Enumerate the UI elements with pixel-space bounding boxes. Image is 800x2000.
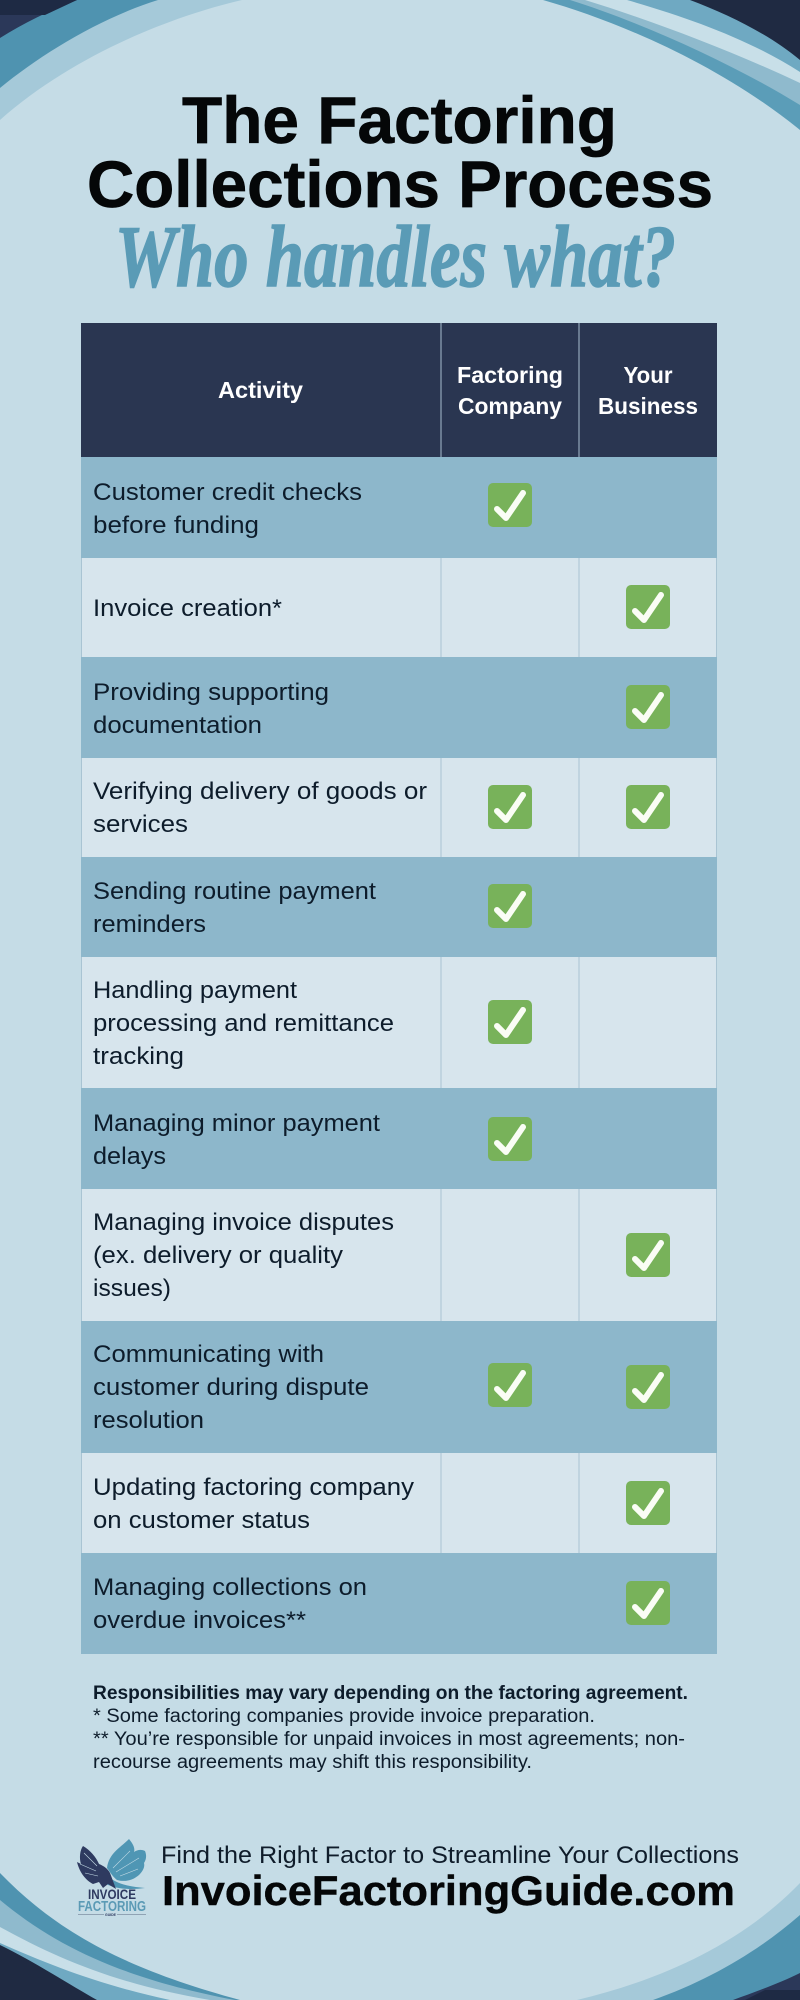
icon: check factoring company bbox=[488, 483, 532, 527]
icon: check factoring company bbox=[488, 785, 532, 829]
row: supporting documentation: Providing supporting bbox=[93, 679, 329, 706]
row: invoice disputes bbox=[81, 1189, 717, 1321]
row: dispute communication: resolution bbox=[93, 1407, 204, 1434]
row: overdue collections: overdue invoices** bbox=[93, 1607, 306, 1634]
footnotes: ** You’re responsible for unpaid invoices in most agreements; non- bbox=[93, 1729, 685, 1750]
row: updating factoring company: Updating factoring company bbox=[93, 1474, 414, 1501]
icon: check your business bbox=[626, 1233, 670, 1277]
icon: check factoring company bbox=[488, 1363, 532, 1407]
row: payment processing: Handling payment bbox=[93, 977, 297, 1004]
row: updating factoring company bbox=[81, 1453, 717, 1553]
row: updating factoring company: on customer status bbox=[93, 1507, 310, 1534]
icon: bird left wing bbox=[77, 1846, 116, 1889]
logo: Invoice Factoring Guide bbox=[77, 1839, 146, 1917]
row: supporting documentation bbox=[81, 657, 717, 758]
row: dispute communication: Communicating with bbox=[93, 1341, 324, 1368]
footnotes: * Some factoring companies provide invoice preparation. bbox=[93, 1706, 595, 1727]
row: invoice disputes: issues) bbox=[93, 1275, 171, 1302]
footnotes: recourse agreements may shift this responsibility. bbox=[93, 1752, 532, 1773]
swoosh: top right corner bbox=[543, 0, 800, 130]
icon: check factoring company bbox=[488, 884, 532, 928]
icon: check your business bbox=[626, 585, 670, 629]
row: dispute communication bbox=[81, 1321, 717, 1453]
table header: Factoring bbox=[457, 362, 563, 388]
footer website: InvoiceFactoringGuide.com bbox=[162, 1867, 735, 1914]
icon: check your business bbox=[626, 785, 670, 829]
logo: Invoice Factoring Guide: INVOICE bbox=[88, 1886, 136, 1902]
row: minor payment delays: Managing minor payment bbox=[93, 1110, 380, 1137]
swoosh: bottom left corner bbox=[0, 1873, 240, 2000]
footnotes: Responsibilities may vary depending on the factoring agreement. bbox=[93, 1683, 688, 1704]
row: supporting documentation: documentation bbox=[93, 712, 262, 739]
row: customer credit checks: Customer credit checks bbox=[93, 479, 362, 506]
row: verifying delivery bbox=[81, 758, 717, 857]
row: payment processing: processing and remittance bbox=[93, 1010, 394, 1037]
title: Collections Process bbox=[87, 147, 713, 221]
row: payment processing: tracking bbox=[93, 1043, 184, 1070]
title: The Factoring bbox=[182, 83, 617, 157]
logo: Invoice Factoring Guide: GUIDE bbox=[105, 1912, 116, 1917]
row: verifying delivery: Verifying delivery of goods or bbox=[93, 778, 427, 805]
footer tagline: Find the Right Factor to Streamline Your Collections bbox=[161, 1842, 739, 1869]
row: payment reminders: Sending routine payment bbox=[93, 878, 376, 905]
row: invoice disputes: (ex. delivery or quality bbox=[93, 1242, 343, 1269]
icon: check factoring company bbox=[488, 1117, 532, 1161]
row: customer credit checks bbox=[81, 457, 717, 558]
icon: check your business bbox=[626, 1481, 670, 1525]
logo: Invoice Factoring Guide: FACTORING bbox=[78, 1899, 146, 1915]
row: payment processing bbox=[81, 957, 717, 1088]
row: invoice creation bbox=[81, 558, 717, 657]
table header: Your bbox=[624, 362, 673, 388]
icon: check your business bbox=[626, 1581, 670, 1625]
row: payment reminders: reminders bbox=[93, 911, 206, 938]
row: payment reminders bbox=[81, 857, 717, 957]
swoosh: bottom right corner bbox=[577, 1883, 800, 2000]
row: overdue collections: Managing collections on bbox=[93, 1574, 367, 1601]
row: verifying delivery: services bbox=[93, 811, 188, 838]
swoosh: top left corner bbox=[0, 0, 242, 120]
table header: Business bbox=[598, 393, 698, 419]
row: invoice creation: Invoice creation* bbox=[93, 595, 282, 622]
row: overdue collections bbox=[81, 1553, 717, 1654]
table header: Company bbox=[458, 393, 562, 419]
icon: bird right wing bbox=[106, 1839, 146, 1889]
row: minor payment delays: delays bbox=[93, 1143, 166, 1170]
row: invoice disputes: Managing invoice disputes bbox=[93, 1209, 394, 1236]
icon: check your business bbox=[626, 685, 670, 729]
row: minor payment delays bbox=[81, 1088, 717, 1189]
table header bbox=[81, 323, 717, 457]
icon: check your business bbox=[626, 1365, 670, 1409]
footnotes bbox=[93, 1683, 688, 1773]
row: dispute communication: customer during dispute bbox=[93, 1374, 369, 1401]
icon: check factoring company bbox=[488, 1000, 532, 1044]
row: customer credit checks: before funding bbox=[93, 512, 259, 539]
table: activities and responsibilities bbox=[81, 323, 717, 1654]
table header: Activity bbox=[218, 377, 303, 403]
title bbox=[87, 83, 713, 221]
